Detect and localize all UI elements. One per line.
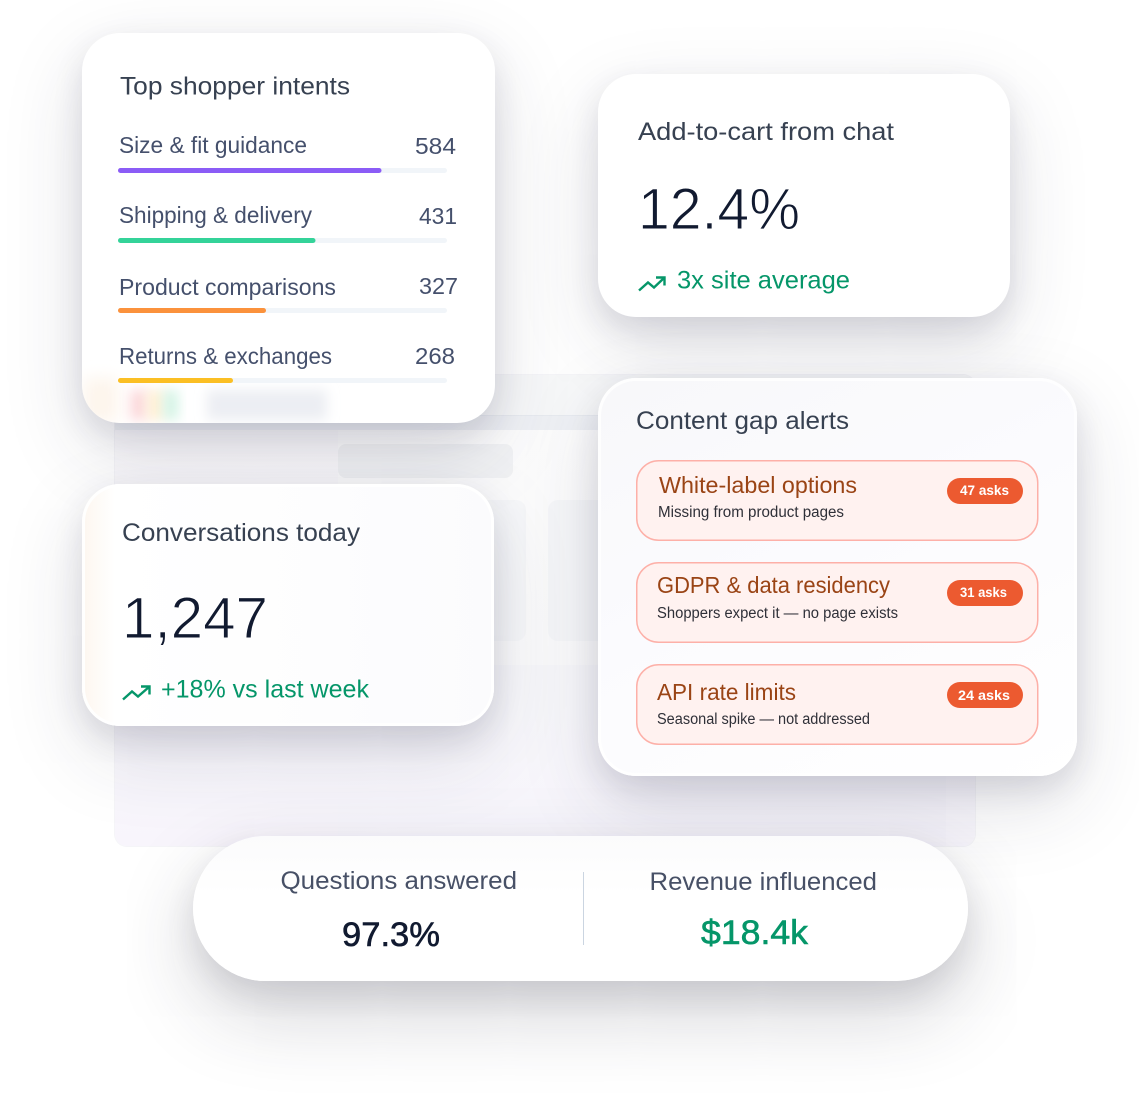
stat: questions answered [280,867,517,954]
row: returns and exchanges [118,343,455,383]
alert: GDPR and data residency [637,563,1038,642]
row: size and fit [118,132,456,173]
row: shipping and delivery [118,202,457,243]
alert: white-label options [637,461,1038,540]
panel: summary pill [193,836,968,981]
panel: content gap alerts [598,378,1077,776]
panel: add to cart from chat [598,74,1010,317]
metric value: 1,247 [122,586,268,651]
window content tile one [338,500,526,641]
trend label: +18% vs last week [161,676,369,704]
alert: GDPR and data residency: Shoppers expect it — no page exists [657,605,898,622]
metric value: 12.4% [638,177,800,242]
stat: revenue influenced: Revenue influenced [650,868,877,896]
row: size and fit: Size & fit guidance [119,132,307,158]
stat: questions answered: Questions answered [280,867,517,895]
panel: conversations today [82,484,494,726]
window title band [115,375,975,415]
window tab strip [115,415,975,430]
background dashboard window [115,375,975,846]
row: size and fit: 584 [415,133,456,159]
stat: questions answered: 97.3% [342,916,440,954]
panel: top shopper intents [82,33,495,423]
window content tile two [548,500,738,641]
alert: white-label options: 47 asks [960,483,1009,498]
heading: Add-to-cart from chat [638,118,894,146]
stat: revenue influenced: $18.4k [701,914,809,952]
row: product comparisons: Product comparisons [119,274,336,300]
row: shipping and delivery: 431 [419,203,457,229]
icon: trend up arrow [639,278,664,290]
row: returns and exchanges: Returns & exchanges [119,343,332,369]
heading: Conversations today [122,519,361,547]
row: product comparisons [118,273,458,313]
alert: GDPR and data residency: 31 asks [960,585,1007,600]
alert: API rate limits: Seasonal spike — not addressed [657,711,870,728]
blurred backdrop showing through [84,378,327,422]
trend label: 3x site average [677,266,850,294]
alert: API rate limits: 24 asks [958,688,1010,703]
window content lower block [338,665,946,846]
window sidebar [115,430,338,846]
row: shipping and delivery: Shipping & delivery [119,202,312,228]
alert: GDPR and data residency: GDPR & data residency [657,572,890,598]
alert: API rate limits [637,665,1038,744]
row: product comparisons: 327 [419,273,458,299]
alert: white-label options: White-label options [659,472,857,498]
alert: white-label options: Missing from product pages [658,504,844,521]
heading: Top shopper intents [120,72,350,100]
stat: revenue influenced [650,868,877,952]
window search field [338,444,513,478]
heading: Content gap alerts [636,407,849,435]
divider [583,872,584,945]
icon: trend up arrow [123,686,150,700]
row: returns and exchanges: 268 [415,343,455,369]
alert: API rate limits: API rate limits [657,679,796,705]
